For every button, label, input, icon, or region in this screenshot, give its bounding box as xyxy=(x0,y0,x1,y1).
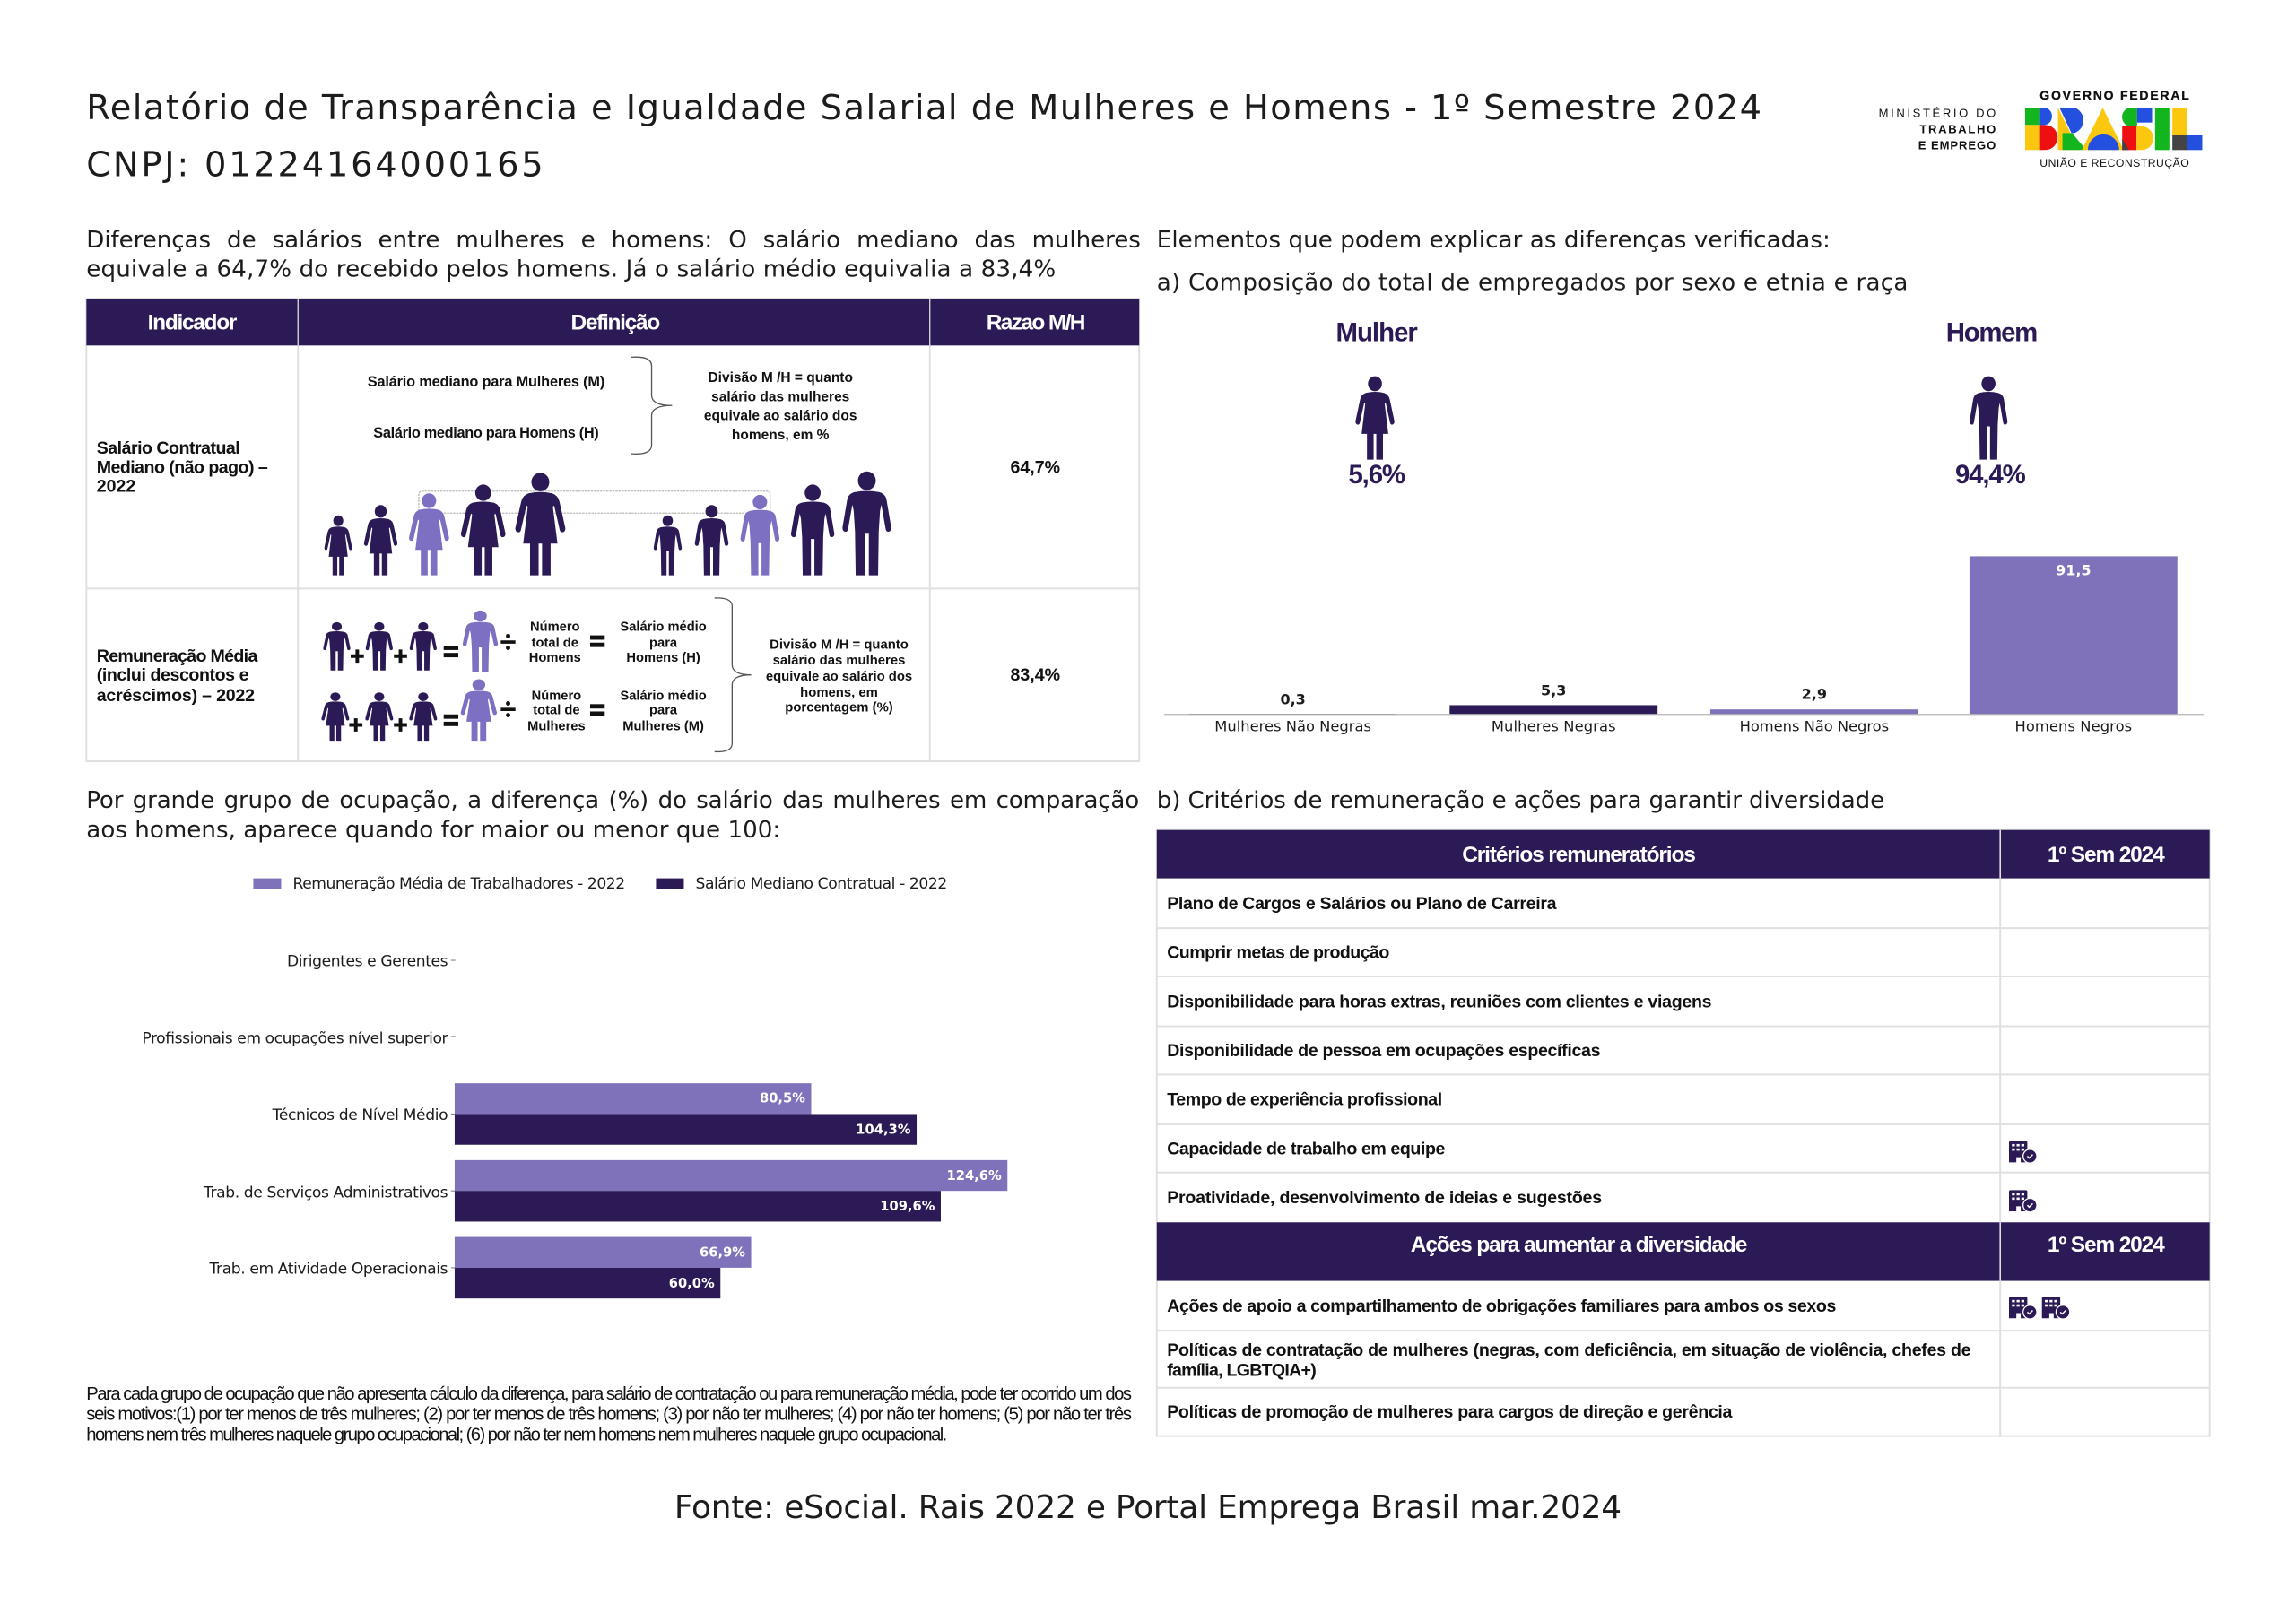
bar chart: etnia e raça: 0,3 xyxy=(1280,690,1306,707)
panel: tabela indicadores xyxy=(86,299,1139,761)
footnote xyxy=(86,1384,1132,1445)
text: salário mediano mulheres e homens: Salário mediano para Homens (H) xyxy=(373,425,599,441)
bar chart: grupos de ocupação: Dirigentes e Gerentes xyxy=(287,953,448,971)
row label: salário contratual mediano xyxy=(97,438,268,497)
legend: Remuneração Média de Trabalhadores - 2022 xyxy=(293,875,625,893)
text: divisão média: Divisão M /H = quanto xyxy=(770,638,909,652)
text: divisão média: salário das mulheres xyxy=(773,654,905,668)
heading: elementos que podem explicar: Elementos que podem explicar as diferenças verificadas: xyxy=(1157,227,1831,254)
value: razão mediana: 64,7% xyxy=(1011,457,1060,477)
rows: ações: Políticas de promoção de mulheres para cargos de direção e gerência xyxy=(1167,1402,1734,1422)
row label: salário contratual mediano: 2022 xyxy=(97,477,135,497)
text: salário mediano mulheres e homens: Salário mediano para Mulheres (M) xyxy=(368,374,604,390)
equation: mulheres: Mulheres (M) xyxy=(622,720,704,734)
rows: critérios: Cumprir metas de produção xyxy=(1167,943,1389,963)
table header: Razao M/H xyxy=(987,310,1085,334)
row label: salário contratual mediano: Mediano (não pago) – xyxy=(97,457,268,477)
logo: ministério do trabalho e emprego: MINISTÉRIO DO xyxy=(1879,107,1996,120)
title: CNPJ: 01224164000165 xyxy=(86,145,544,186)
equation: homens: Salário médio xyxy=(620,620,707,635)
equation: homens: Homens xyxy=(529,651,581,665)
heading: mulher: Mulher xyxy=(1335,317,1417,347)
text block: diferenças de salários: equivale a 64,7% do recebido pelos homens. Já o salário médio equivalia a 83,4% xyxy=(86,256,1056,283)
bar chart: etnia e raça: 5,3 xyxy=(1541,682,1566,699)
row label: salário contratual mediano: Salário Contratual xyxy=(97,438,240,458)
text: divisão mediana: equivale ao salário dos xyxy=(704,409,857,424)
row label: remuneração média: acréscimos) – 2022 xyxy=(97,686,255,706)
rows: critérios: Proatividade, desenvolvimento de ideias e sugestões xyxy=(1167,1188,1602,1208)
equation: mulheres: total de xyxy=(533,704,580,718)
text block: por grande grupo de ocupação: aos homens, aparece quando for maior ou menor que 100: xyxy=(86,817,780,844)
rows: critérios: Tempo de experiência profissional xyxy=(1167,1090,1442,1110)
rows: critérios: Plano de Cargos e Salários ou Plano de Carreira xyxy=(1167,894,1558,914)
rows: ações: Ações de apoio a compartilhamento de obrigações familiares para ambos os sexos xyxy=(1167,1297,1836,1316)
equation: homens: Homens (H) xyxy=(626,651,700,665)
brace: média xyxy=(715,598,752,751)
logo: governo federal brasil xyxy=(2025,88,2202,169)
equation: homens xyxy=(323,611,707,672)
source: Fonte: eSocial. Rais 2022 e Portal Emprega Brasil mar.2024 xyxy=(674,1489,1622,1526)
table header: critérios: 1º Sem 2024 xyxy=(2048,843,2165,867)
logo: ministério do trabalho e emprego: E EMPREGO xyxy=(1918,139,1996,152)
text: divisão mediana: salário das mulheres xyxy=(711,389,849,404)
title xyxy=(86,88,1761,186)
row label: remuneração média xyxy=(97,646,258,706)
table header: critérios: Critérios remuneratórios xyxy=(1462,843,1695,867)
icon: mulher xyxy=(1355,377,1395,460)
rows: ações: família, LGBTQIA+) xyxy=(1167,1361,1317,1381)
panel: critérios remuneratórios table xyxy=(1157,830,2210,1436)
bar chart: grupos de ocupação: Trab. de Serviços Administrativos xyxy=(203,1184,448,1202)
bar chart: etnia e raça xyxy=(1164,556,2204,735)
rows: ações xyxy=(1167,1297,1971,1422)
logo: ministério do trabalho e emprego: TRABALHO xyxy=(1919,123,1996,136)
table header: Indicador xyxy=(148,310,238,334)
legend: Salário Mediano Contratual - 2022 xyxy=(696,875,947,893)
bar chart: grupos de ocupação: Trab. em Atividade Operacionais xyxy=(208,1260,448,1278)
icons: empresas ações de apoio xyxy=(2009,1297,2070,1319)
icon: empresa proatividade xyxy=(2009,1190,2037,1212)
icons: row of women xyxy=(325,473,565,576)
bar chart: grupos de ocupação: 109,6% xyxy=(880,1199,935,1214)
text: divisão mediana xyxy=(704,370,857,443)
text block: por grande grupo de ocupação: Por grande grupo de ocupação, a diferença (%) do salário das mulheres em comparação xyxy=(86,787,1139,814)
footnote: seis motivos:(1) por ter menos de três mulheres; (2) por ter menos de três homens; (3) por não ter mulheres; (4) por não ter homens; (5) por não ter três xyxy=(86,1405,1132,1425)
bar chart: etnia e raça: 91,5 xyxy=(2056,562,2092,579)
text block: diferenças de salários: Diferenças de salários entre mulheres e homens: O salário mediano das mulheres xyxy=(86,227,1141,254)
panel: composição por sexo xyxy=(1335,317,2037,490)
table header xyxy=(86,299,1139,345)
bar chart: grupos de ocupação: 104,3% xyxy=(856,1122,911,1137)
row label: remuneração média: (inclui descontos e xyxy=(97,665,249,685)
text: salário mediano mulheres e homens xyxy=(368,374,604,441)
table header: ações: 1º Sem 2024 xyxy=(2048,1233,2165,1257)
bar chart: grupos de ocupação: Profissionais em ocupações nível superior xyxy=(142,1029,449,1047)
bar chart: grupos de ocupação: 66,9% xyxy=(700,1245,745,1261)
bar chart: grupos de ocupação: 124,6% xyxy=(947,1168,1002,1184)
logo: governo federal brasil: GOVERNO FEDERAL xyxy=(2039,88,2189,102)
icon: brasil wordmark xyxy=(2025,108,2202,150)
bar chart: grupos de ocupação: 80,5% xyxy=(760,1090,805,1106)
dotted highlight rectangle xyxy=(419,491,770,513)
bar chart: etnia e raça: Homens Negros xyxy=(2015,718,2132,735)
brace: mediano xyxy=(631,357,672,454)
table header: critérios xyxy=(1157,830,2210,879)
heading: critérios de remuneração: b) Critérios de remuneração e ações para garantir diversidade xyxy=(1157,787,1884,814)
text block: diferenças de salários xyxy=(86,227,1141,283)
bar chart: etnia e raça: 2,9 xyxy=(1802,686,1827,703)
text: divisão mediana: Divisão M /H = quanto xyxy=(708,370,853,386)
rows: critérios xyxy=(1167,894,1712,1208)
equation: homens: Número xyxy=(530,620,580,635)
equation: homens: total de xyxy=(532,637,578,651)
bar chart: grupos de ocupação: Técnicos de Nível Médio xyxy=(272,1106,448,1124)
text: divisão média: porcentagem (%) xyxy=(785,700,893,715)
heading: homem: Homem xyxy=(1946,317,2037,347)
bar chart: etnia e raça: Homens Não Negros xyxy=(1740,718,1889,735)
footnote: Para cada grupo de ocupação que não apresenta cálculo da diferença, para salário de contratação ou para remuneração média, pode ter ocorrido um dos xyxy=(86,1384,1132,1404)
equation: mulheres: Mulheres xyxy=(527,720,586,734)
value: percentual homem: 94,4% xyxy=(1955,460,2026,490)
logo: ministério do trabalho e emprego xyxy=(1879,107,1996,152)
table header: ações xyxy=(1157,1222,2210,1281)
title: Relatório de Transparência e Igualdade Salarial de Mulheres e Homens - 1º Semestre 2024 xyxy=(86,88,1761,128)
table header: ações: Ações para aumentar a diversidade xyxy=(1411,1233,1747,1257)
text: divisão média: equivale ao salário dos xyxy=(766,670,912,684)
footnote: homens nem três mulheres naquele grupo ocupacional; (6) por não ter nem homens nem mulheres naquele grupo ocupacional. xyxy=(86,1426,947,1445)
equation: mulheres: Salário médio xyxy=(620,689,707,703)
logo: governo federal brasil: UNIÃO E RECONSTRUÇÃO xyxy=(2039,157,2189,169)
text: divisão média xyxy=(766,638,912,715)
rows: critérios: Capacidade de trabalho em equipe xyxy=(1167,1139,1446,1158)
equation: homens: para xyxy=(649,637,678,651)
table header: Definição xyxy=(571,310,659,334)
text: divisão média: homens, em xyxy=(800,686,878,700)
value: percentual mulher: 5,6% xyxy=(1348,460,1405,490)
bar chart: grupos de ocupação xyxy=(142,953,1007,1298)
icon: empresa capacidade xyxy=(2009,1141,2037,1163)
rows: critérios: Disponibilidade para horas extras, reuniões com clientes e viagens xyxy=(1167,992,1712,1011)
icons: row of men xyxy=(654,472,891,576)
text: divisão mediana: homens, em % xyxy=(732,428,830,443)
rows: ações: Políticas de contratação de mulheres (negras, com deficiência, em situação de violência, chefes de xyxy=(1167,1340,1971,1360)
legend xyxy=(253,875,947,893)
heading: composição do total de empregados: a) Composição do total de empregados por sexo e etnia e raça xyxy=(1157,269,1908,296)
icon: homem xyxy=(1970,377,2007,460)
value: razão média: 83,4% xyxy=(1011,665,1060,685)
equation: mulheres: Número xyxy=(532,689,581,703)
rows: critérios: Disponibilidade de pessoa em ocupações específicas xyxy=(1167,1041,1601,1061)
row label: remuneração média: Remuneração Média xyxy=(97,646,258,666)
text block: por grande grupo de ocupação xyxy=(86,787,1139,844)
bar chart: grupos de ocupação: 60,0% xyxy=(669,1276,715,1291)
equation: mulheres: para xyxy=(649,704,678,718)
bar chart: etnia e raça: Mulheres Negras xyxy=(1492,718,1616,735)
equation: mulheres xyxy=(321,680,707,741)
bar chart: etnia e raça: Mulheres Não Negras xyxy=(1214,718,1371,735)
